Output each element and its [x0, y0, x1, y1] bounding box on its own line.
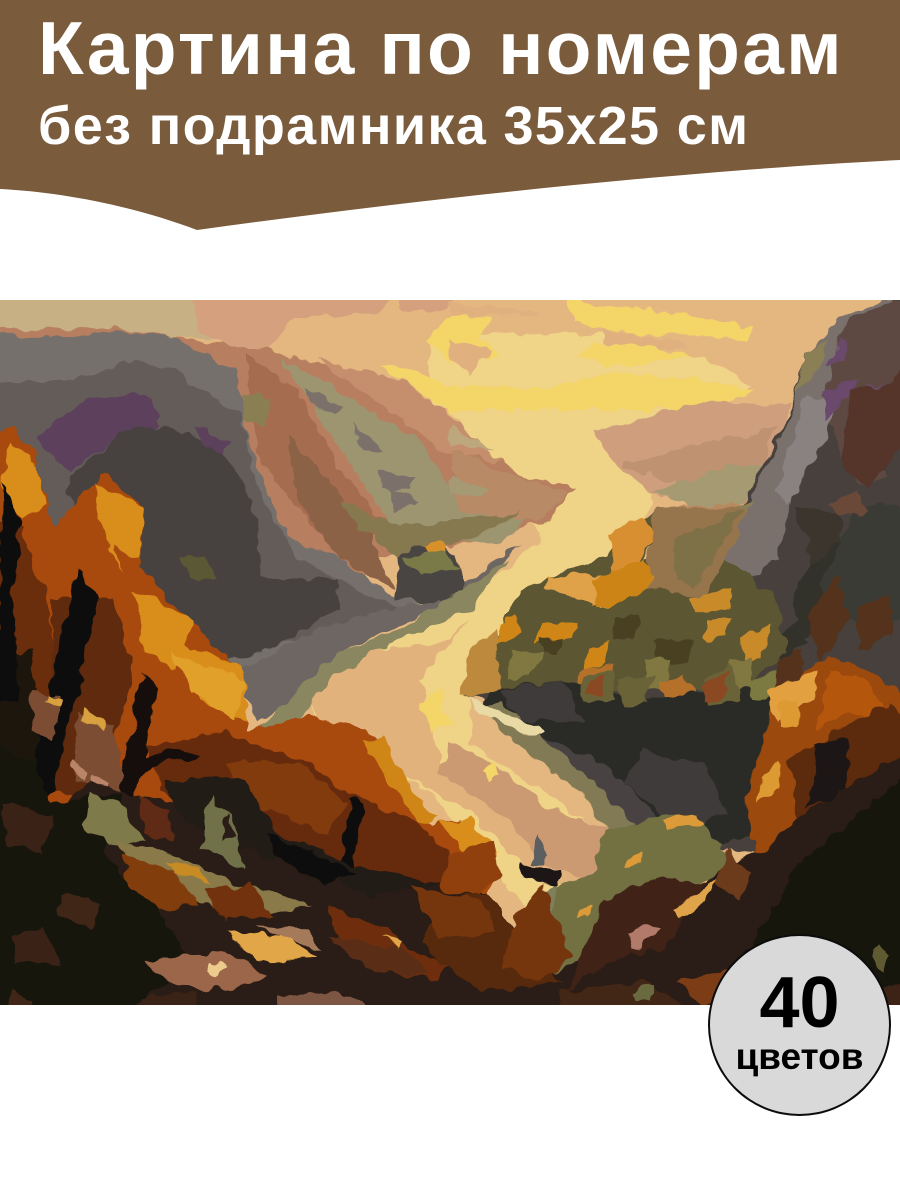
ground patches [1, 793, 900, 1012]
label цветов: цветов [735, 1036, 864, 1077]
painting: autumn river valley [0, 300, 900, 1005]
autumn forest on far bank [460, 507, 787, 701]
lower river shore left [236, 543, 521, 732]
distant right hills [595, 403, 792, 568]
left far hills [0, 329, 572, 701]
title: Картина по номерам [38, 6, 844, 90]
badge: 40 цветов [708, 934, 891, 1116]
right orange tree [746, 655, 900, 895]
small green trees near boat [532, 813, 736, 976]
left purple-grey hills [0, 331, 430, 701]
left trees and canopy [0, 426, 496, 915]
number 40: 40 [759, 963, 840, 1043]
boat [519, 832, 559, 887]
subtitle: без подрамника 35х25 см [38, 96, 749, 156]
banner background [0, 0, 900, 230]
river and lake [297, 410, 685, 905]
foreground dark slope [0, 742, 900, 1012]
right cliff [470, 293, 900, 854]
dark forest reflection [470, 650, 802, 864]
sky [0, 293, 900, 1012]
